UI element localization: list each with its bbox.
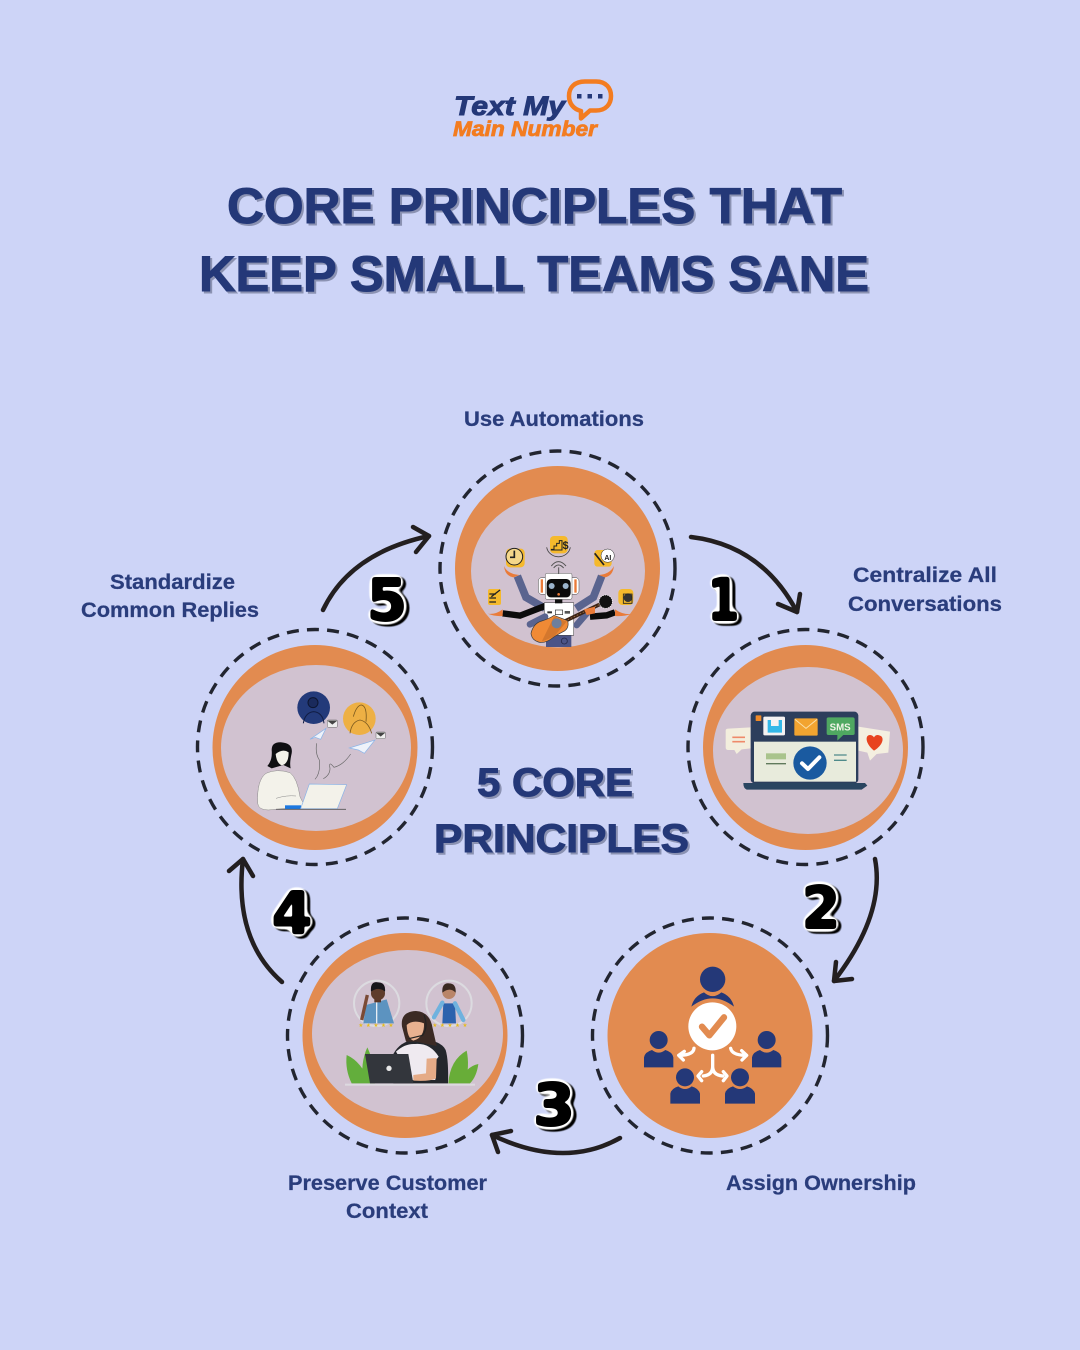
icon: juggling robot with guitar — [488, 536, 633, 647]
number 4: 4 — [272, 879, 312, 947]
number 3: 3 — [533, 1071, 575, 1139]
icon: laptop with message channels: SMS — [830, 722, 851, 733]
arrow: 4 to 5 — [229, 859, 282, 982]
panel: preserve customer context — [288, 918, 522, 1153]
panel: use automations — [440, 451, 675, 686]
label: Assign Ownership: Assign Ownership — [726, 1172, 916, 1195]
icon: support agent with customers — [345, 981, 478, 1086]
logo: Text My Main Number: Text My — [454, 91, 567, 121]
title — [199, 178, 869, 302]
panel: assign ownership — [592, 918, 828, 1153]
label: Preserve Customer Context — [288, 1172, 487, 1223]
number 2: 2 — [802, 874, 840, 942]
icon: juggling robot with guitar: AI — [604, 555, 611, 562]
label: Preserve Customer Context: Preserve Customer — [288, 1172, 487, 1195]
arrow: 3 to 4 — [492, 1131, 620, 1153]
label: Standardize Common Replies — [81, 571, 259, 622]
label: Standardize Common Replies: Standardize — [110, 571, 235, 594]
label: Centralize All Conversations: Conversations — [848, 593, 1002, 616]
arrow: 5 to 1 — [323, 527, 429, 610]
label: Standardize Common Replies: Common Replies — [81, 599, 259, 622]
icon: juggling robot with guitar: $ — [563, 540, 569, 552]
icon: laptop with message channels — [726, 712, 890, 790]
label: Use Automations: Use Automations — [464, 408, 644, 431]
panel: centralize all conversations — [688, 630, 923, 864]
title: KEEP SMALL TEAMS SANE — [199, 246, 869, 302]
label: Centralize All Conversations — [848, 564, 1002, 616]
icon: team with assigned owner — [644, 967, 781, 1104]
arrow: 1 to 2 — [691, 537, 800, 612]
logo: Text My Main Number: Main Number — [453, 118, 599, 141]
number 5: 5 — [367, 566, 407, 634]
icon: support agent with customers: ★★★★★ — [358, 1023, 394, 1029]
title: CORE PRINCIPLES THAT — [227, 178, 842, 234]
center heading — [434, 761, 689, 861]
arrow: 2 to 3 — [834, 859, 877, 981]
icon: woman sending paper plane messages — [258, 691, 385, 810]
center heading: 5 CORE — [477, 761, 633, 805]
label: Centralize All Conversations: Centralize All — [853, 564, 997, 587]
icon: support agent with customers: ★★★★★ — [432, 1023, 468, 1029]
panel: standardize common replies — [198, 630, 432, 864]
logo: Text My Main Number — [453, 82, 611, 141]
center heading: PRINCIPLES — [434, 817, 689, 861]
number 1: 1 — [708, 566, 739, 634]
label: Preserve Customer Context: Context — [346, 1200, 428, 1223]
